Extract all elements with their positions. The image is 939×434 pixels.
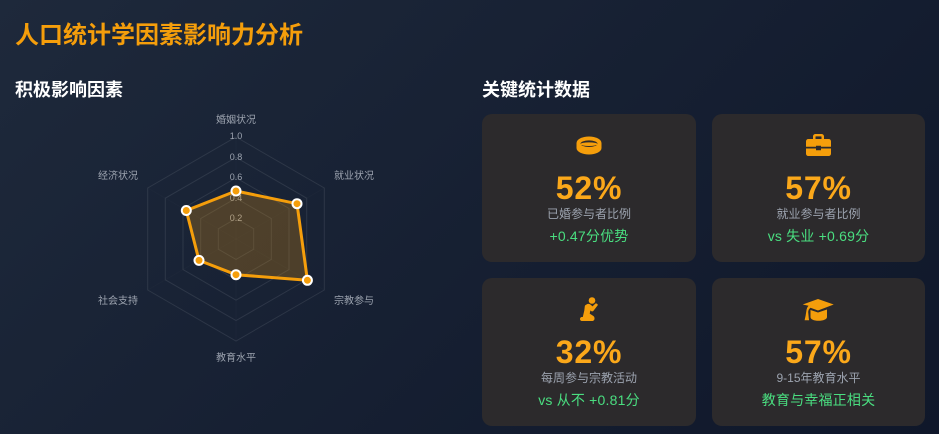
- axis ticks: 0.2: [230, 213, 242, 223]
- axis labels: 宗教参与: [334, 294, 374, 307]
- stat card: employment: [712, 114, 925, 262]
- axis labels: 婚姻状况: [216, 113, 256, 126]
- axis ticks: 1.0: [230, 131, 242, 141]
- data area: [186, 191, 307, 280]
- icon: praying person: [580, 297, 598, 321]
- comparison: vs 从不 +0.81分: [538, 392, 640, 408]
- axis ticks: [230, 131, 242, 223]
- data points: [182, 186, 312, 285]
- stat card: religion: [482, 278, 696, 426]
- comparison: 教育与幸福正相关: [762, 392, 875, 408]
- value: 57%: [785, 170, 852, 206]
- title: 人口统计学因素影响力分析: [15, 22, 303, 49]
- icon: briefcase: [806, 134, 831, 156]
- label: 就业参与者比例: [776, 207, 860, 221]
- axis labels: [98, 113, 374, 364]
- value: 52%: [556, 170, 622, 206]
- axis labels: 教育水平: [216, 351, 256, 364]
- axis labels: 经济状况: [98, 169, 138, 182]
- stat card: education: [712, 278, 925, 426]
- axis ticks: 0.8: [230, 152, 242, 162]
- heading: positive factors: 积极影响因素: [15, 80, 123, 100]
- icon: ring: [576, 136, 602, 154]
- comparison: vs 失业 +0.69分: [768, 228, 869, 244]
- icon: graduation cap: [802, 299, 834, 321]
- value: 57%: [785, 334, 852, 370]
- axis labels: 社会支持: [98, 294, 138, 307]
- radar chart: [98, 113, 374, 364]
- value: 32%: [556, 334, 622, 370]
- label: 9-15年教育水平: [776, 371, 861, 385]
- axis labels: 就业状况: [334, 169, 374, 182]
- label: 每周参与宗教活动: [541, 371, 637, 385]
- axis ticks: 0.6: [230, 172, 242, 182]
- stat card: married: [482, 114, 696, 262]
- comparison: +0.47分优势: [549, 228, 629, 244]
- label: 已婚参与者比例: [547, 207, 631, 221]
- heading: key statistics: 关键统计数据: [482, 80, 590, 100]
- axis ticks: 0.4: [230, 193, 242, 203]
